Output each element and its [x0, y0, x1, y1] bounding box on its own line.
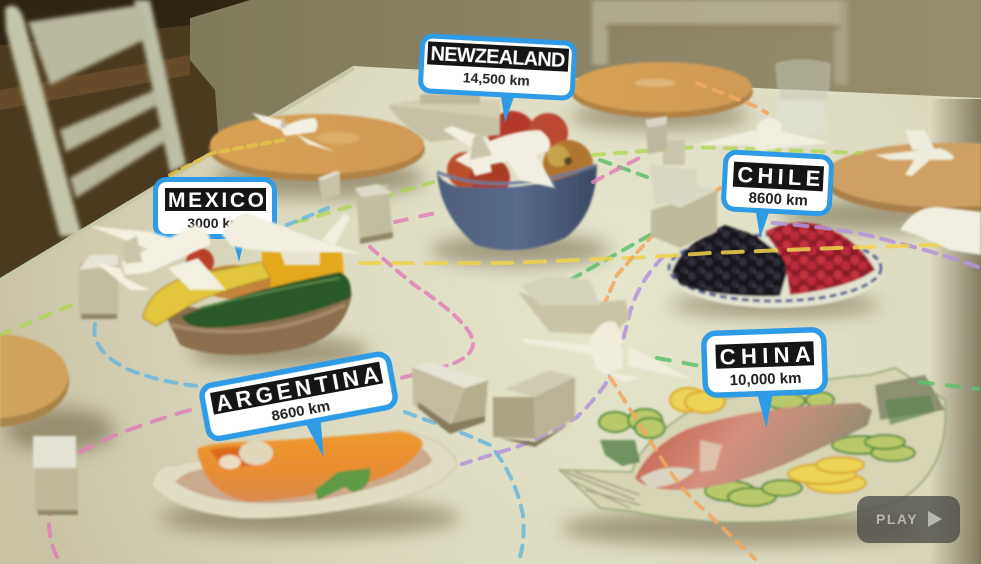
plate top centre — [571, 62, 753, 118]
label: Chile: 8600 km — [748, 189, 808, 210]
tower model — [650, 140, 697, 205]
cargo ship back — [388, 94, 500, 142]
herb leaf — [315, 468, 370, 500]
label: New Zealand: NEWZEALAND — [430, 43, 566, 72]
truck: centre left — [412, 362, 488, 434]
plane: Mexico right — [222, 212, 365, 265]
play button: PLAY — [876, 511, 918, 527]
route: pink — [49, 155, 645, 557]
label: Mexico: MEXICO — [168, 189, 264, 212]
route: yellow — [170, 140, 978, 263]
platter fin ribs — [565, 472, 640, 508]
label: China: 10,000 km — [729, 370, 802, 389]
yellow peppers — [262, 252, 345, 300]
plate top left — [209, 114, 425, 181]
truck: right of bowl — [651, 186, 717, 248]
banana — [143, 262, 270, 326]
blackberries — [672, 225, 790, 296]
truck: small box — [318, 171, 340, 200]
label: Chile: CHILE — [737, 162, 821, 191]
label: Argentina: 8600 km — [270, 397, 331, 425]
lemon slices — [670, 388, 866, 493]
route: orange — [600, 83, 767, 559]
label: New Zealand — [419, 36, 575, 126]
truck: bottom left — [33, 436, 78, 515]
label: Chile — [722, 152, 832, 242]
truck: Mexico side — [79, 255, 118, 319]
lime slices — [599, 392, 915, 506]
fish body — [635, 403, 872, 490]
squash plate — [152, 430, 458, 518]
plane: centre — [520, 321, 693, 382]
plane: right edge — [900, 207, 981, 255]
table edge shading — [930, 99, 981, 564]
apples — [186, 248, 271, 299]
plate left edge — [0, 334, 69, 427]
plane: New Zealand — [443, 126, 555, 188]
label: Argentina — [200, 353, 404, 477]
plate right — [823, 143, 981, 214]
label: Argentina: ARGENTINA — [214, 362, 381, 416]
route: purple — [462, 222, 978, 464]
route: green — [0, 147, 860, 335]
bowl of apples — [437, 111, 597, 250]
route: blue — [94, 208, 524, 557]
truck: tall — [355, 184, 393, 244]
label: Mexico: 3000 km — [187, 215, 243, 231]
zucchini — [182, 272, 351, 328]
label: China — [703, 329, 827, 430]
plane: Chile side — [695, 118, 830, 150]
cargo ship centre — [518, 275, 630, 335]
plane: on plate left — [252, 113, 335, 152]
chair right — [592, 0, 848, 85]
label: New Zealand: 14,500 km — [463, 69, 530, 89]
butternut squash — [197, 431, 423, 502]
fish platter — [560, 368, 945, 522]
route: dark green — [570, 160, 978, 389]
blue bowl — [437, 165, 597, 250]
truck: centre right — [493, 370, 575, 447]
plane: Mexico left — [90, 225, 226, 290]
box model — [645, 116, 667, 154]
shadows — [5, 102, 980, 546]
apples — [447, 111, 593, 198]
drinking glass — [776, 60, 830, 135]
play button — [857, 496, 960, 543]
plane: far right — [875, 130, 954, 176]
raspberries — [765, 223, 875, 295]
berry plate — [666, 223, 884, 308]
fruit and vegetable bowl — [143, 248, 352, 355]
chair left — [5, 0, 186, 236]
label: Mexico — [156, 180, 274, 262]
label: China: CHINA — [719, 341, 811, 370]
dill — [600, 440, 640, 466]
